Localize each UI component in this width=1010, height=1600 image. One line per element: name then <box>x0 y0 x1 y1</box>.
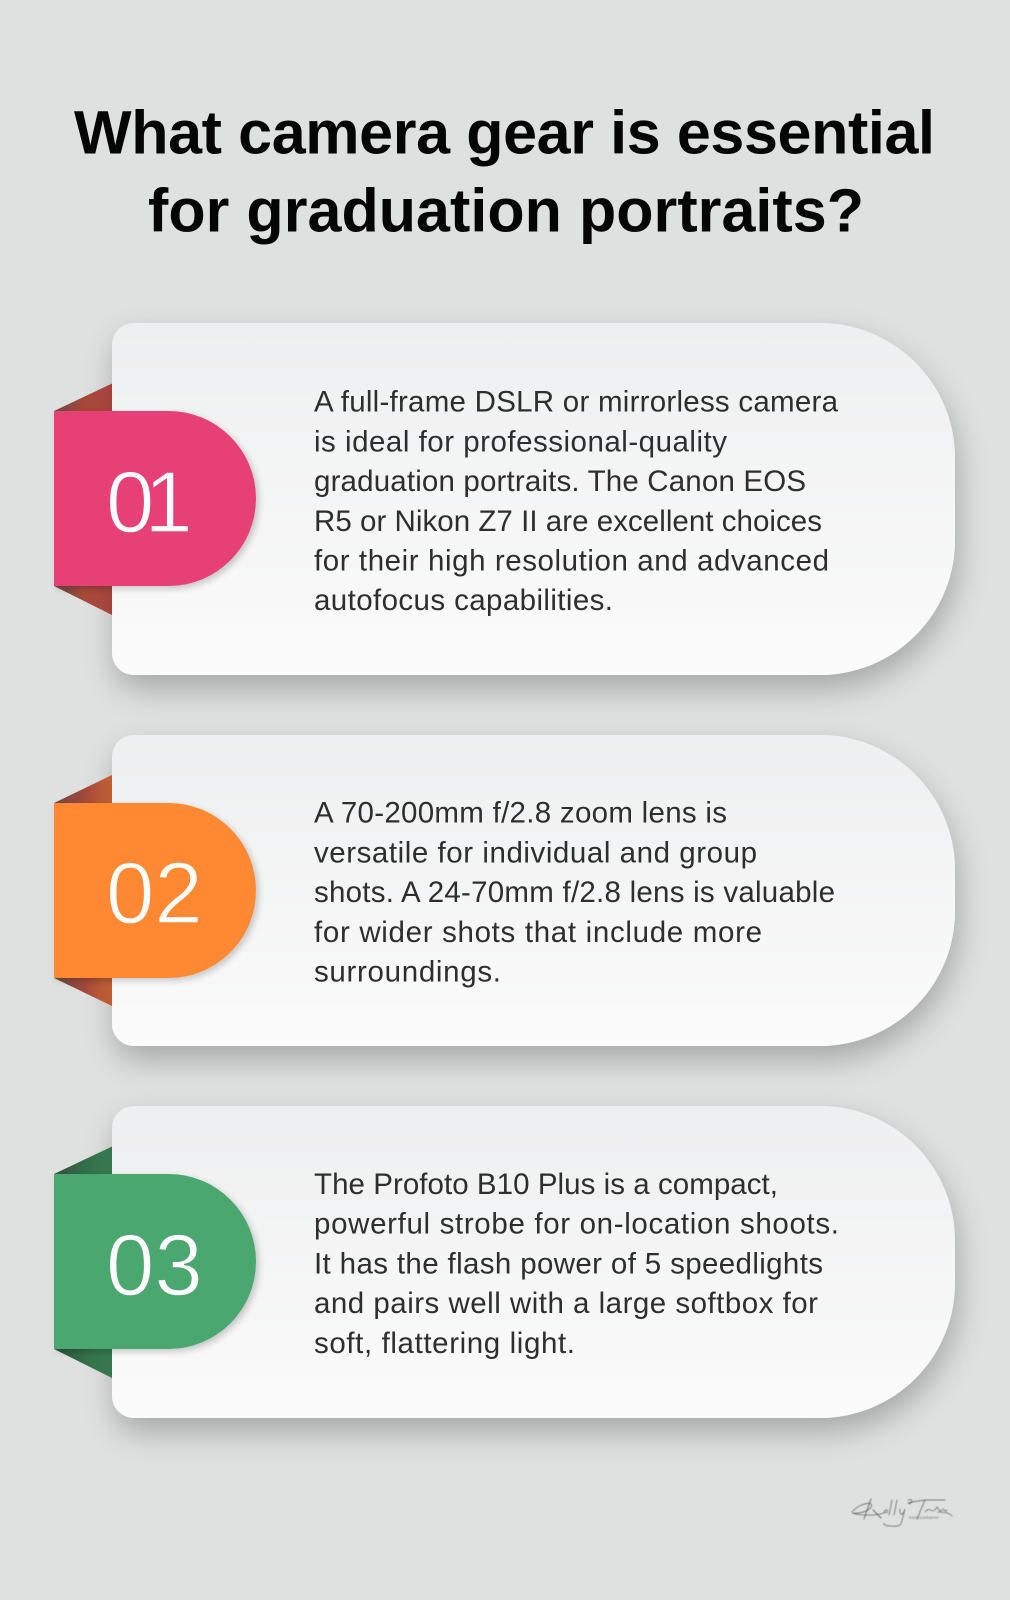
text: step 02: A 70-200mm f/2.8 zoom lens is <box>314 797 727 830</box>
text: step 01: graduation portraits. The Canon EOS <box>314 465 806 498</box>
card: step 02 <box>112 735 955 1046</box>
text: step 02: shots. A 24-70mm f/2.8 lens is valuable <box>314 876 835 909</box>
logo: signature <box>852 1499 952 1526</box>
text: step 01: autofocus capabilities. <box>314 584 613 617</box>
title: for graduation portraits? <box>148 176 864 244</box>
ribbon fold: step 01 <box>54 384 112 615</box>
text: step 01: R5 or Nikon Z7 II are excellent choices <box>314 505 822 538</box>
panel: step 02 lenses <box>54 735 955 1046</box>
logo: signature: PHOTOGRAPHY <box>909 1516 940 1520</box>
text: step 01: is ideal for professional-quality <box>314 425 727 458</box>
text: step 03: powerful strobe for on-location shoots. <box>314 1208 839 1241</box>
text: step 02 <box>314 797 835 988</box>
badge: 02 <box>54 803 256 978</box>
text: step 03: and pairs well with a large softbox for <box>314 1287 818 1320</box>
card: step 01 <box>112 323 955 675</box>
text: step 03 <box>314 1168 839 1360</box>
text: step 02: surroundings. <box>314 956 501 988</box>
title: What camera gear is essential <box>74 98 935 166</box>
text: step 03: It has the flash power of 5 speedlights <box>314 1247 823 1280</box>
badge: 01: 01 <box>106 454 193 551</box>
title <box>74 98 935 244</box>
badge: 03 <box>54 1174 256 1349</box>
text: step 01 <box>314 386 839 617</box>
card: step 03 <box>112 1106 955 1418</box>
ribbon fold: step 02 <box>54 775 112 1006</box>
ribbon fold: step 03 <box>54 1146 112 1378</box>
badge: 02: 02 <box>106 845 203 942</box>
badge: 03: 03 <box>106 1217 203 1314</box>
text: step 03: The Profoto B10 Plus is a compact, <box>314 1168 778 1201</box>
text: step 03: soft, flattering light. <box>314 1327 575 1360</box>
panel: step 01 camera body <box>54 323 955 675</box>
text: step 01: for their high resolution and advanced <box>314 544 829 578</box>
text: step 02: versatile for individual and group <box>314 836 757 869</box>
text: step 02: for wider shots that include more <box>314 916 762 949</box>
panel: step 03 lighting <box>54 1106 955 1418</box>
badge: 01 <box>54 411 256 586</box>
text: step 01: A full-frame DSLR or mirrorless camera <box>314 386 839 419</box>
